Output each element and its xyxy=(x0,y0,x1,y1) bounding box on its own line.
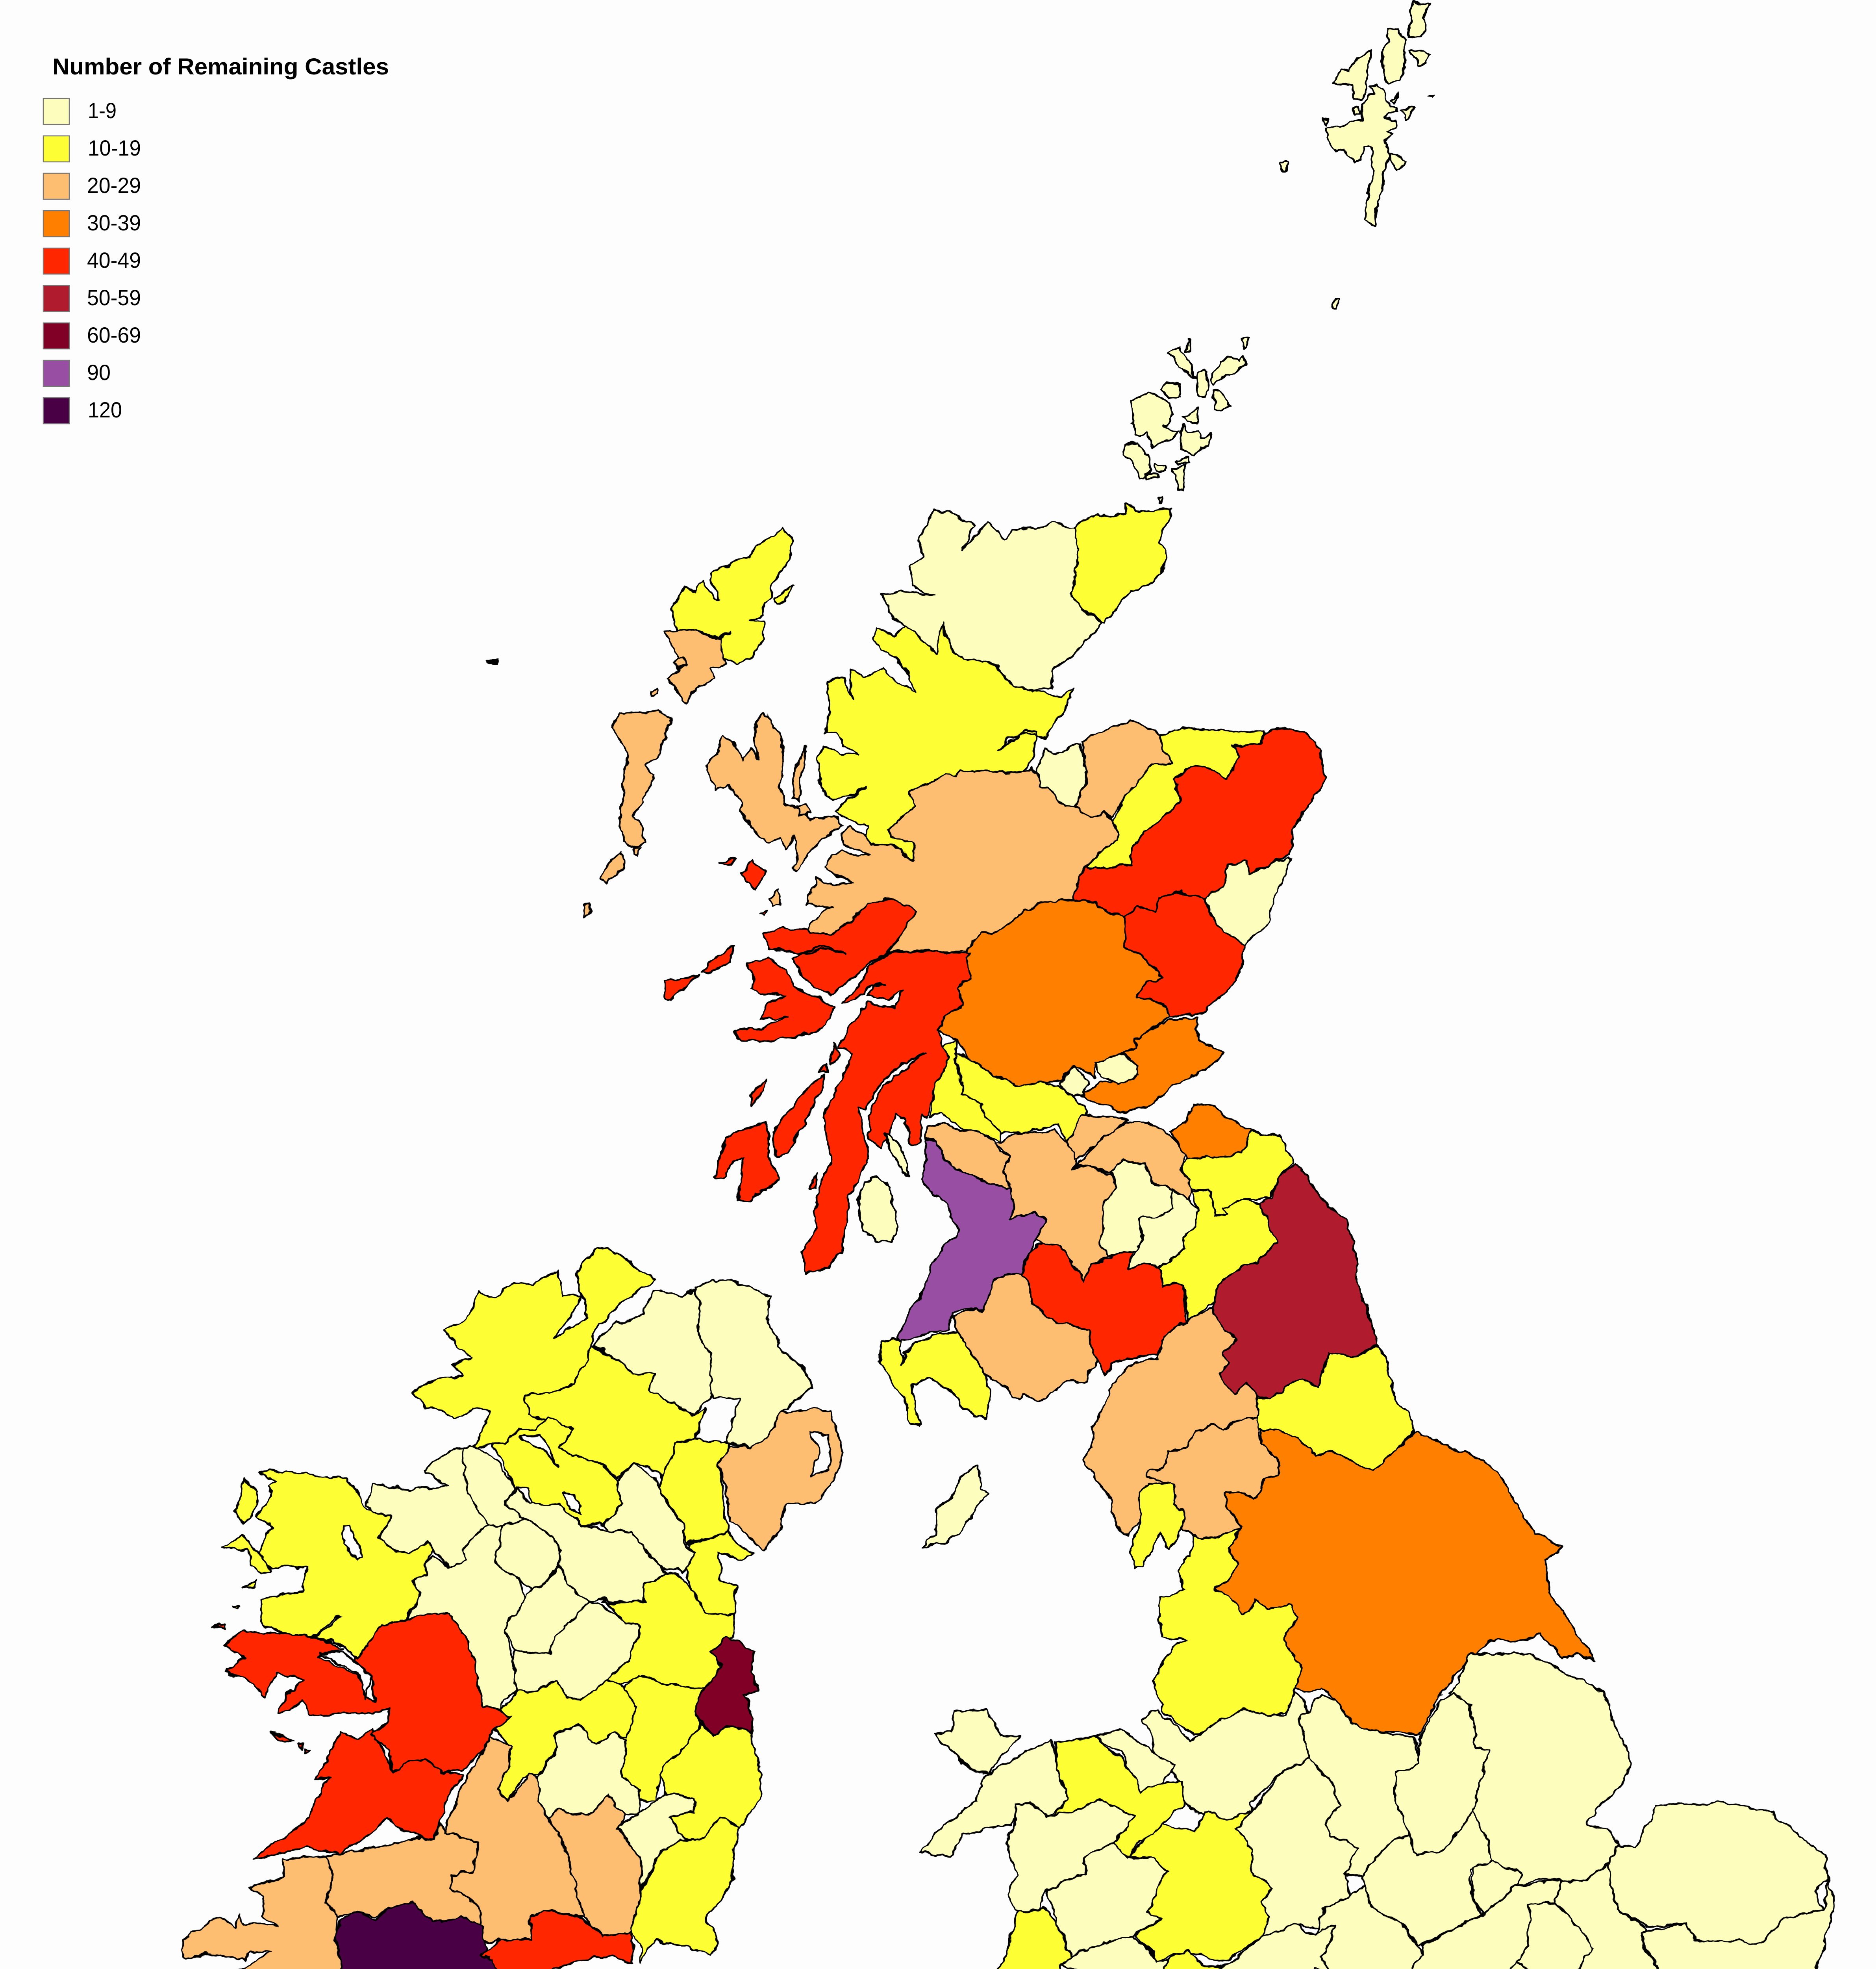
region: Roscommon xyxy=(405,1524,524,1712)
region: Monaghan xyxy=(603,1463,696,1573)
region: Furness xyxy=(1131,1483,1183,1567)
region: Louth xyxy=(684,1533,753,1619)
region: Sutherland xyxy=(883,510,1101,691)
region: Carlow xyxy=(617,1793,694,1888)
region: Ayrshire xyxy=(897,1140,1045,1342)
region: Waterford xyxy=(481,1911,632,1969)
region: Westmeath xyxy=(505,1567,589,1654)
region: Herefordshire xyxy=(1148,1949,1258,1969)
region: Isle of Man xyxy=(922,1467,989,1548)
region: Aberdeenshire xyxy=(1073,727,1324,917)
region: Lincolnshire xyxy=(1449,1654,1630,1886)
region: Kilkenny xyxy=(548,1795,641,1937)
legend item: 10-19 xyxy=(43,135,141,162)
region: Merionethshire xyxy=(1006,1800,1135,1913)
region: Leicestershire xyxy=(1362,1811,1493,1946)
region: County Durham xyxy=(1256,1347,1414,1470)
region: Lancashire xyxy=(1153,1524,1301,1735)
region: Bute xyxy=(885,1131,909,1176)
region: Norfolk xyxy=(1606,1803,1828,1943)
legend item: 120: 120 xyxy=(88,397,122,422)
legend item: 30-39: 30-39 xyxy=(87,210,141,235)
legend item: 120 xyxy=(43,397,122,424)
region: Wicklow xyxy=(660,1723,760,1842)
legend item: 90 xyxy=(43,360,111,386)
region: Cavan xyxy=(505,1487,667,1605)
legend item: 30-39 xyxy=(43,210,141,237)
region: Mayo xyxy=(257,1470,433,1660)
region: Longford xyxy=(496,1518,561,1591)
region: Warwickshire xyxy=(1315,1886,1422,1969)
region: Cheshire xyxy=(1141,1693,1309,1819)
region: Mayo islands xyxy=(221,1481,271,1611)
region: Anglesey xyxy=(934,1709,1021,1772)
legend item: 60-69: 60-69 xyxy=(87,323,141,347)
region: Worcestershire xyxy=(1222,1924,1335,1969)
region: Shropshire xyxy=(1128,1811,1272,1963)
legend item: 10-19: 10-19 xyxy=(88,135,141,160)
region: Moray xyxy=(1075,721,1172,818)
region: Derbyshire xyxy=(1298,1695,1419,1877)
region: Kerry xyxy=(183,1856,352,1969)
region: Caernarfonshire xyxy=(920,1739,1068,1855)
legend item: 60-69 xyxy=(43,323,141,349)
region: Roxburghshire xyxy=(1158,1190,1276,1321)
region: Offaly north xyxy=(512,1602,641,1700)
region: Nairn xyxy=(1037,743,1088,807)
legend item: 50-59 xyxy=(43,285,141,311)
region: Antrim xyxy=(696,1279,813,1446)
region: Armagh xyxy=(658,1440,730,1544)
region: Kinross-shire xyxy=(1095,1053,1137,1085)
region: Nottinghamshire xyxy=(1396,1693,1489,1855)
region: Berwickshire xyxy=(1181,1131,1294,1217)
region: Fife xyxy=(1082,1017,1224,1114)
region: East Lothian xyxy=(1171,1104,1251,1161)
map: England and Wales xyxy=(830,1654,1834,1969)
map: Shetland and Orkney xyxy=(1123,2,1434,504)
region: Skye xyxy=(706,713,841,871)
region: Peeblesshire xyxy=(1100,1161,1173,1255)
region: Clare xyxy=(252,1729,462,1859)
region: Northamptonshire xyxy=(1402,1880,1563,1969)
region: Eigg xyxy=(768,890,780,906)
region: Montgomeryshire xyxy=(1048,1841,1168,1957)
region: Staffordshire xyxy=(1235,1759,1359,1941)
region: Shetland xyxy=(1278,2,1434,308)
region: Clackmannanshire xyxy=(1059,1068,1088,1097)
region: Selkirkshire xyxy=(1128,1190,1198,1269)
region: Wigtownshire xyxy=(880,1332,991,1427)
region: Aran Islands xyxy=(212,1624,311,1753)
region: Tyrone xyxy=(524,1345,706,1478)
region: Harris and Uists xyxy=(583,630,725,916)
region: Flintshire xyxy=(1094,1728,1175,1792)
legend item: 40-49 xyxy=(43,248,141,274)
region: Yorkshire xyxy=(1213,1429,1595,1735)
legend item: 40-49: 40-49 xyxy=(87,248,141,273)
region: Fermanagh xyxy=(493,1417,622,1524)
region: Rutland xyxy=(1472,1861,1523,1916)
region: Arran xyxy=(858,1176,900,1242)
region: Huntingdonshire xyxy=(1516,1902,1593,1969)
region: Perthshire xyxy=(938,901,1170,1086)
region: Cumberland xyxy=(1083,1307,1259,1536)
region: Cambridgeshire xyxy=(1556,1863,1660,1969)
region: Donegal xyxy=(412,1247,656,1446)
map: Ireland xyxy=(183,1247,844,1969)
region: Kildare xyxy=(622,1674,706,1801)
region: Wexford xyxy=(632,1819,741,1963)
region: Renfrewshire xyxy=(926,1124,1010,1190)
legend item: 1-9 xyxy=(43,98,117,124)
region: Ardnamurchan and Morvern xyxy=(764,898,915,995)
region: Cardiganshire xyxy=(926,1908,1071,1969)
region: Dumfriesshire xyxy=(1022,1242,1186,1375)
legend title: Number of Remaining Castles xyxy=(52,54,389,80)
region: Radnorshire xyxy=(1061,1935,1168,1969)
region: Lanarkshire xyxy=(995,1131,1117,1280)
region: Sligo xyxy=(367,1449,489,1567)
legend item: 50-59: 50-59 xyxy=(87,285,141,310)
region: Midlothian xyxy=(1075,1122,1191,1199)
region: Offaly xyxy=(496,1680,636,1801)
region: Westmorland xyxy=(1146,1418,1281,1538)
region: Caithness xyxy=(1070,503,1171,625)
region: Laois xyxy=(539,1726,639,1819)
region: West Lothian xyxy=(1068,1115,1128,1161)
legend item: 20-29: 20-29 xyxy=(87,173,141,198)
region: Limerick xyxy=(326,1821,479,1925)
map: Scotland north and west xyxy=(583,503,1324,1273)
region: Banff xyxy=(1086,727,1263,868)
region: Londonderry xyxy=(593,1290,713,1414)
region: Bedfordshire xyxy=(1496,1963,1570,1969)
map: southern Scotland and northern England xyxy=(858,1104,1595,1735)
region: Orkney xyxy=(1123,338,1250,504)
region: Leitrim xyxy=(462,1446,524,1527)
region: Suffolk xyxy=(1640,1880,1834,1969)
legend item: 1-9: 1-9 xyxy=(88,98,117,123)
region: Dunbartonshire xyxy=(930,1039,1002,1141)
region: Ross and Cromarty xyxy=(817,625,1076,859)
region: Meath xyxy=(603,1573,734,1689)
region: Northumberland xyxy=(1211,1163,1379,1400)
legend item: 20-29 xyxy=(43,173,141,199)
region: Inner Hebrides islands xyxy=(665,858,839,1202)
region: lakes and sea loughs xyxy=(322,1431,830,1697)
legend xyxy=(43,54,389,424)
legend item: 90: 90 xyxy=(87,360,111,385)
region: Denbighshire xyxy=(1054,1737,1185,1858)
region: Dublin xyxy=(694,1637,758,1735)
region: Kirkcudbrightshire xyxy=(952,1274,1098,1400)
region: Lewis xyxy=(672,528,793,663)
region: Inverness-shire xyxy=(808,768,1117,952)
region: Cork xyxy=(209,1902,517,1969)
region: St Kilda xyxy=(487,658,497,665)
region: Galway xyxy=(224,1613,510,1772)
region: Stirlingshire xyxy=(954,1053,1090,1141)
region: Tipperary xyxy=(441,1735,584,1943)
region: Kincardineshire xyxy=(1203,857,1291,945)
region: Argyll xyxy=(802,951,971,1273)
region: Down xyxy=(720,1409,844,1550)
region: Angus xyxy=(1123,892,1244,1017)
